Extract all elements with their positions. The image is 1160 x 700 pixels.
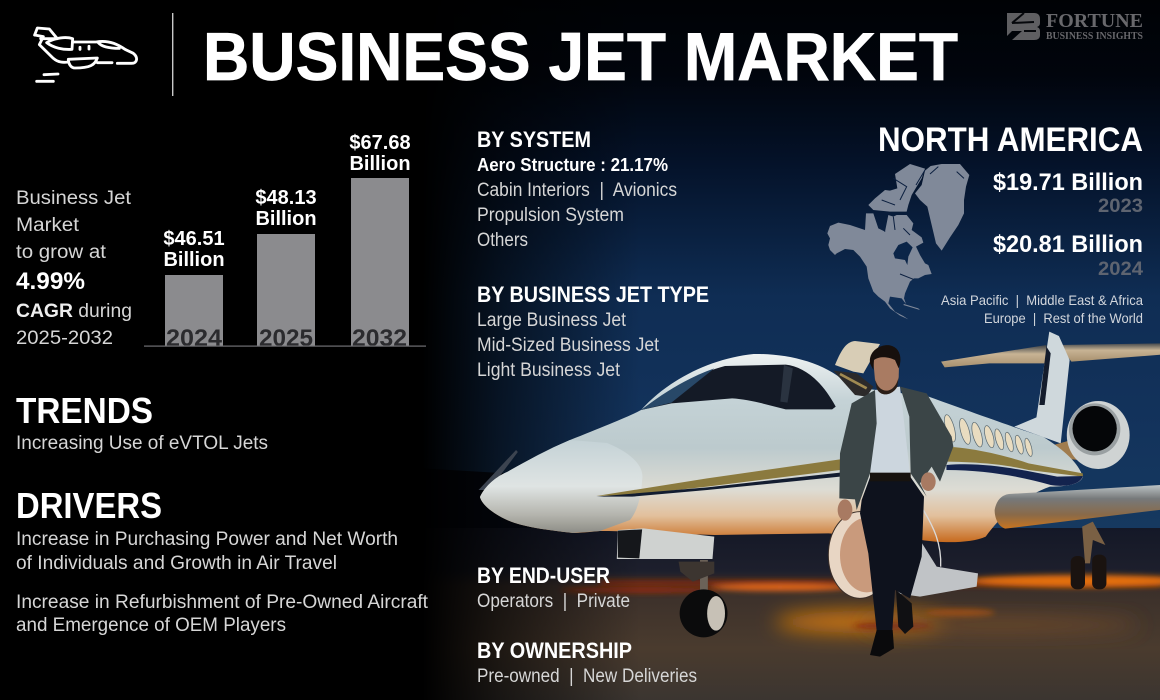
panel: north america values xyxy=(878,121,1143,326)
bar 2032: 2032 xyxy=(352,325,407,352)
bar 2025 xyxy=(255,187,317,352)
text block: CAGR summary: Market xyxy=(16,215,80,236)
man belt xyxy=(870,473,911,481)
panel: drivers xyxy=(16,485,429,636)
jet nose cone xyxy=(480,440,642,533)
jet fuselage xyxy=(480,354,1083,542)
text block: CAGR summary: 4.99% xyxy=(16,268,85,295)
man head xyxy=(870,345,900,394)
panel: trends: Increasing Use of eVTOL Jets xyxy=(16,433,268,454)
logo: Fortune Business Insights: FORTUNE xyxy=(1046,10,1143,32)
panel: by business jet type xyxy=(477,282,709,381)
bar 2032: $67.68 xyxy=(349,132,411,154)
bar chart: market size xyxy=(144,132,426,352)
panel: trends: TRENDS xyxy=(16,390,153,431)
text block: CAGR summary: to grow at xyxy=(16,242,107,263)
panel: by system: Propulsion System xyxy=(477,205,624,226)
jet wing xyxy=(995,483,1160,529)
bar 2024: Billion xyxy=(163,249,225,271)
panel: drivers: of Individuals and Growth in Air Travel xyxy=(16,553,337,574)
airstairs xyxy=(888,520,978,597)
illustration: man, door and airstairs xyxy=(828,341,978,657)
panel: by business jet type: Large Business Jet xyxy=(477,310,627,331)
jet nose landing gear xyxy=(679,560,727,637)
panel: drivers: Increase in Refurbishment of Pre-Owned Aircraft xyxy=(16,592,429,613)
bar 2025: $48.13 xyxy=(255,187,317,209)
illustration: business jet xyxy=(479,332,1160,637)
left black fade overlay xyxy=(0,0,640,700)
panel: by business jet type: Light Business Jet xyxy=(477,360,621,381)
text block: CAGR summary xyxy=(16,188,132,349)
panel: north america values: 2023 xyxy=(1098,196,1143,217)
logo: Fortune Business Insights xyxy=(1007,10,1143,42)
panel: by ownership: Pre-owned | New Deliveries xyxy=(477,666,697,687)
panel: by ownership xyxy=(477,638,697,687)
stair rail xyxy=(923,510,941,567)
panel: drivers: DRIVERS xyxy=(16,485,162,526)
panel: by business jet type: BY BUSINESS JET TYPE xyxy=(477,282,709,307)
Caribbean islands xyxy=(903,304,920,310)
text block: CAGR summary: CAGR during xyxy=(16,301,132,322)
jet engine xyxy=(1054,401,1130,469)
panel: north america values: NORTH AMERICA xyxy=(878,121,1143,159)
panel: north america values: Europe | Rest of the World xyxy=(984,310,1143,326)
panel: by ownership: BY OWNERSHIP xyxy=(477,638,632,663)
open cabin door upper xyxy=(833,341,880,397)
cabin door lower xyxy=(828,512,893,598)
text block: CAGR summary: 2025-2032 xyxy=(16,328,113,349)
bar 2032 xyxy=(349,132,411,352)
man trousers and shoes xyxy=(860,477,924,657)
panel: by business jet type: Mid-Sized Business Jet xyxy=(477,335,660,356)
bar 2024 xyxy=(163,228,225,352)
jet cockpit windows xyxy=(641,365,836,410)
Canadian Arctic islands xyxy=(868,164,925,212)
man hands xyxy=(838,472,936,521)
logo: Fortune Business Insights: BUSINESS INSIGHTS xyxy=(1046,30,1143,42)
panel: by system: BY SYSTEM xyxy=(477,127,591,152)
background: tarmac xyxy=(0,467,1160,700)
jet tail fin and stabiliser xyxy=(941,332,1160,443)
panel: north america values: $19.71 Billion xyxy=(993,169,1143,196)
bar 2024: $46.51 xyxy=(163,228,225,250)
jet gold and navy stripes xyxy=(596,446,1083,497)
panel: trends xyxy=(16,390,268,454)
map: North America xyxy=(825,164,969,319)
panel: drivers: Increase in Purchasing Power and Net Worth xyxy=(16,529,398,550)
text block: CAGR summary: Business Jet xyxy=(16,188,132,209)
Hudson Bay xyxy=(893,242,913,265)
bar 2032: Billion xyxy=(349,153,411,175)
man shirt xyxy=(870,387,910,473)
header divider xyxy=(172,13,173,96)
icon: jet outline xyxy=(35,28,137,81)
panel: drivers: and Emergence of OEM Players xyxy=(16,615,286,636)
panel: by system: Others xyxy=(477,230,528,251)
panel: by system: Cabin Interiors | Avionics xyxy=(477,180,677,201)
panel: by end-user: BY END-USER xyxy=(477,563,610,588)
jet far wing xyxy=(479,450,518,490)
bar 2025: 2025 xyxy=(259,325,313,352)
panel: by end-user xyxy=(477,563,630,612)
Arctic channels xyxy=(877,167,964,279)
man jacket xyxy=(839,387,953,510)
panel: by system: Aero Structure : 21.17% xyxy=(477,155,668,175)
jet main landing gear xyxy=(1071,522,1106,589)
bar 2025: Billion xyxy=(255,208,317,230)
title: BUSINESS JET MARKET xyxy=(203,19,958,95)
bar 2024: 2024 xyxy=(166,325,223,352)
panel: north america values: Asia Pacific | Middle East & Africa xyxy=(941,292,1143,308)
Greenland xyxy=(915,164,969,251)
jet cabin windows xyxy=(942,414,1034,457)
panel: by system xyxy=(477,127,677,251)
background: night sky xyxy=(0,0,1160,540)
mainland xyxy=(825,213,932,319)
jet gear door xyxy=(617,528,714,559)
panel: north america values: 2024 xyxy=(1098,259,1143,280)
panel: by end-user: Operators | Private xyxy=(477,591,630,612)
panel: north america values: $20.81 Billion xyxy=(993,231,1143,258)
